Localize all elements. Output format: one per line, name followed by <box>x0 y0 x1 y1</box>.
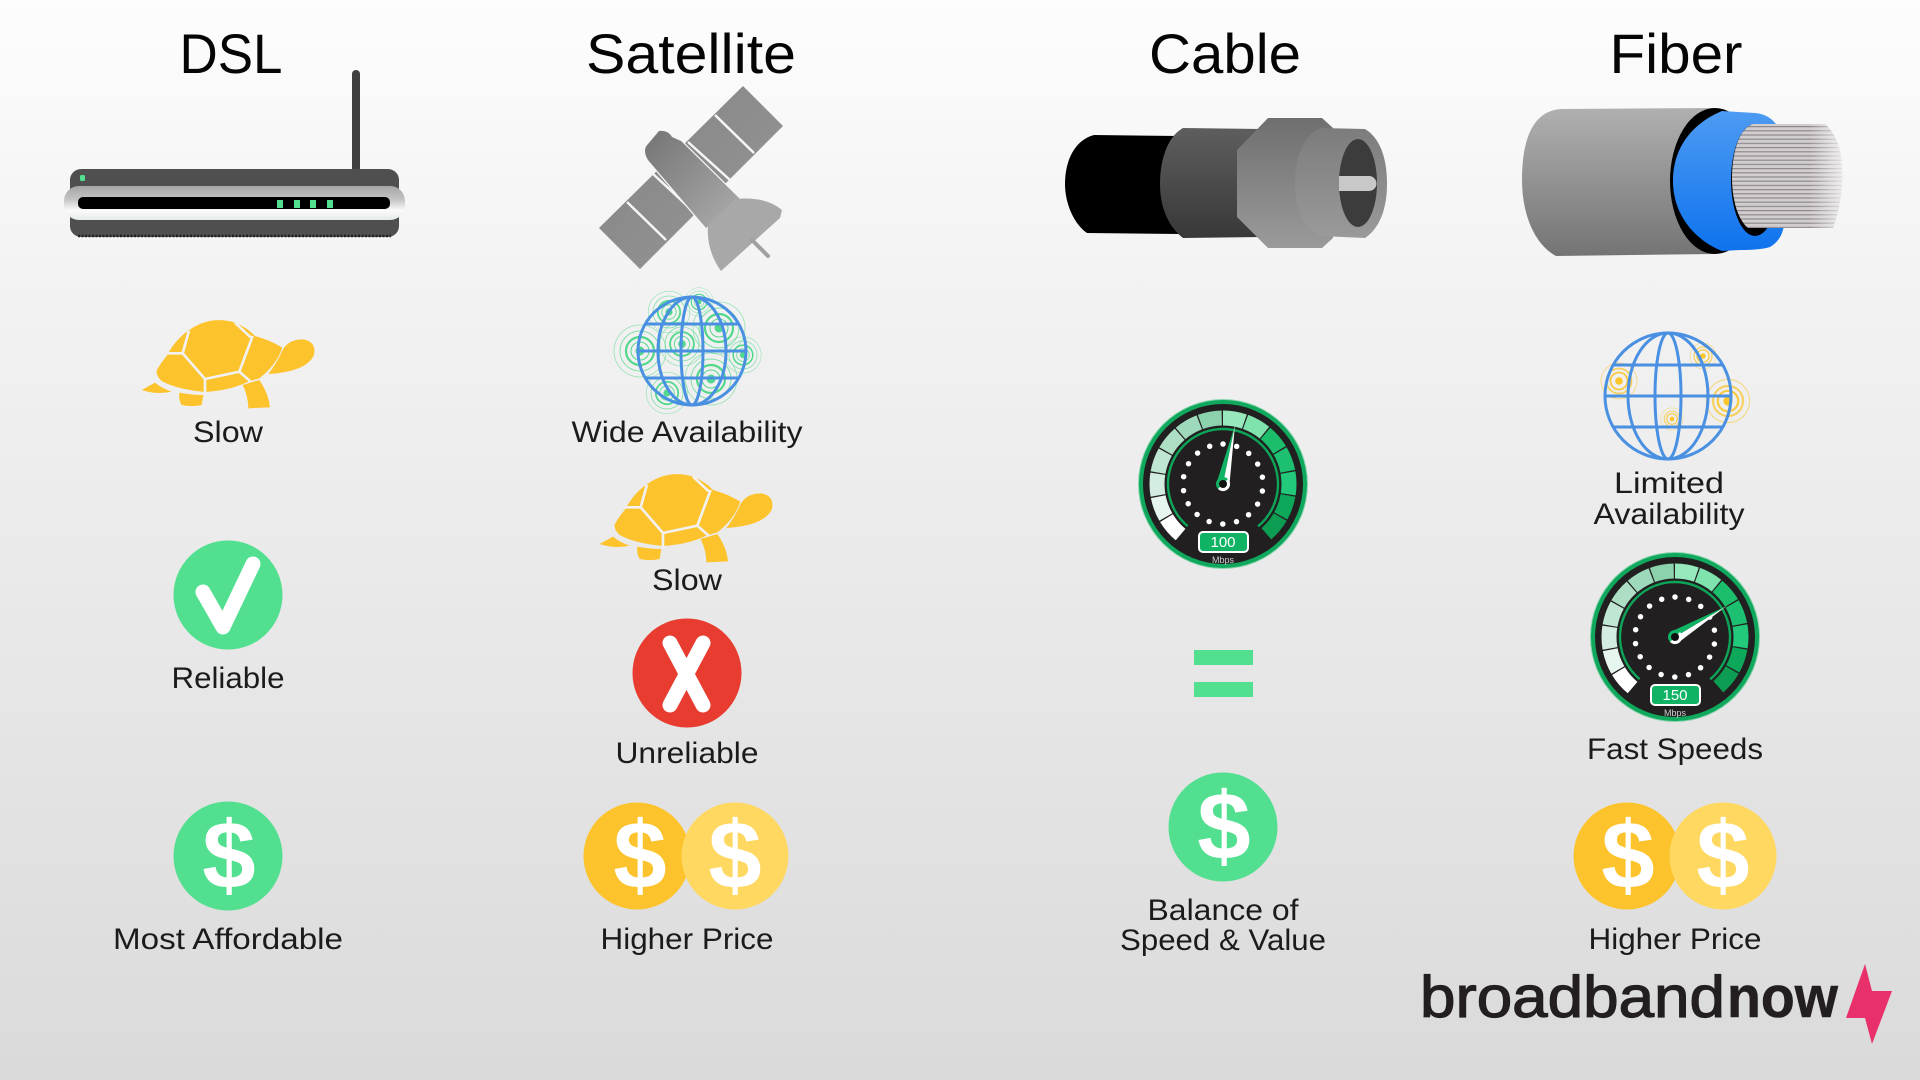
icon: check mark <box>174 540 282 650</box>
icon: dollar <box>1168 772 1278 882</box>
label: fast speeds: Fast Speeds <box>1587 733 1763 766</box>
icon: dollar: $ <box>1197 773 1251 880</box>
icon: equals sign <box>1194 650 1253 697</box>
icon: red X <box>632 618 742 728</box>
icon: turtle <box>142 320 314 408</box>
icon: speed gauge 150: Mbps <box>1664 708 1686 718</box>
label: higher price: Higher Price <box>1588 923 1762 956</box>
icon: globe with yellow signal rings <box>1601 333 1750 459</box>
label: limited availability: Limited <box>1614 467 1724 500</box>
label: balance of speed and value <box>1120 894 1326 957</box>
heading: Fiber: Fiber <box>1610 22 1742 85</box>
label: limited availability <box>1594 467 1744 531</box>
label: limited availability: Availability <box>1594 498 1744 531</box>
icon: fiber optic cable <box>1522 108 1842 256</box>
label: higher price: Higher Price <box>600 923 774 956</box>
icon: satellite <box>599 86 783 271</box>
logo: broadbandnow <box>1420 964 1892 1044</box>
label: slow: Slow <box>652 564 722 597</box>
label: wide availability: Wide Availability <box>572 416 802 449</box>
icon: two dollars: $ <box>708 802 762 909</box>
icon: router <box>64 70 405 237</box>
icon: speed gauge 100: 100 <box>1210 534 1236 551</box>
icon: dollar <box>174 802 282 910</box>
label: unreliable: Unreliable <box>616 737 758 770</box>
icon: two dollars <box>1574 802 1776 910</box>
icon: globe with green signal rings <box>614 288 761 414</box>
column: Cable <box>1065 22 1387 957</box>
logo: broadbandnow: broadband <box>1420 965 1725 1030</box>
icon: two dollars <box>584 802 788 910</box>
icon: two dollars: $ <box>1601 802 1655 909</box>
icon: speed gauge 100: Mbps <box>1212 555 1234 565</box>
icon: coaxial connector <box>1065 118 1387 248</box>
icon: two dollars: $ <box>1696 802 1750 909</box>
column: Satellite <box>572 22 802 956</box>
icon: dollar: $ <box>202 802 256 909</box>
icon: speed gauge 150 <box>1582 544 1768 730</box>
heading: Satellite: Satellite <box>586 22 796 85</box>
label: balance of speed and value: Balance of <box>1148 894 1299 927</box>
icon: two dollars: $ <box>613 802 667 909</box>
heading: Cable: Cable <box>1149 22 1301 85</box>
icon: speed gauge 100 <box>1130 391 1316 577</box>
label: slow: Slow <box>193 416 263 449</box>
column: DSL <box>64 22 405 956</box>
label: reliable: Reliable <box>172 662 284 695</box>
label: balance of speed and value: Speed & Value <box>1120 924 1326 957</box>
label: most affordable: Most Affordable <box>113 923 343 956</box>
logo: broadbandnow: now <box>1727 965 1839 1030</box>
icon: speed gauge 150: 150 <box>1662 687 1688 704</box>
icon: turtle <box>600 474 772 562</box>
heading: DSL: DSL <box>180 22 282 85</box>
column: Fiber <box>1522 22 1842 956</box>
